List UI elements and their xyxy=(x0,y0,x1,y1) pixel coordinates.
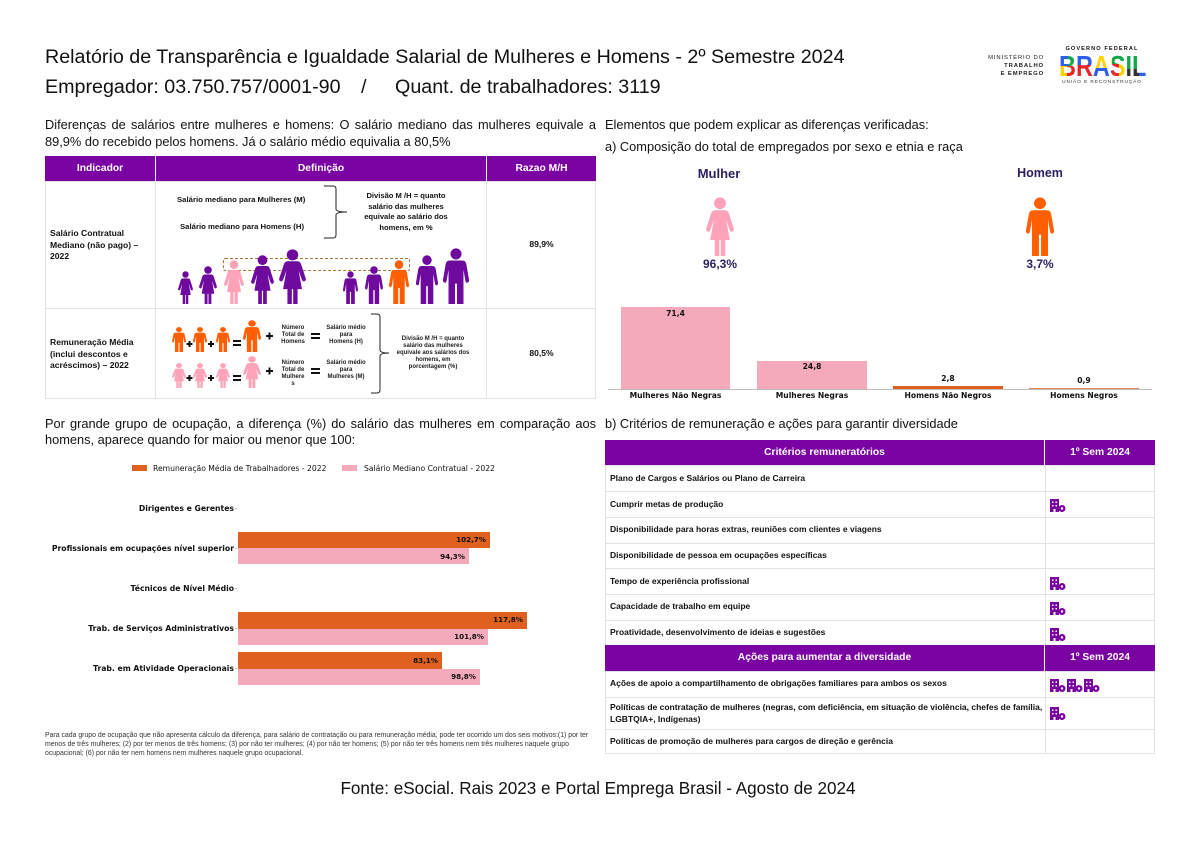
logo: ministério: E EMPREGO xyxy=(1001,71,1044,77)
chart: composition columns: Mulheres Negras xyxy=(776,391,848,400)
panel: criteria table: 1º Sem 2024 xyxy=(1070,447,1130,458)
text block: occupation: homens, aparece quando for maior ou menor que 100: xyxy=(45,432,355,447)
panel: indicator table: Razao M/H xyxy=(515,163,568,174)
text: mean salary women: para xyxy=(340,367,352,373)
definition: division note: equivale ao salário dos xyxy=(364,212,448,221)
employer line: / xyxy=(361,76,366,98)
text: division mean xyxy=(396,336,470,370)
definition: median salary labels xyxy=(177,195,305,231)
panel: criteria table: Plano de Cargos e Salários ou Plano de Carreira xyxy=(610,473,805,483)
brace: median xyxy=(324,186,347,238)
panel: criteria table: Ações para aumentar a diversidade xyxy=(738,652,911,663)
panel: criteria table: 1º Sem 2024 xyxy=(1070,652,1130,663)
sex composition: woman xyxy=(698,166,740,271)
sex composition: woman: 96,3% xyxy=(703,257,737,271)
employer line: Quant. de trabalhadores: 3119 xyxy=(395,76,661,98)
chart: occupation bars: Trab. em Atividade Operacionais xyxy=(93,664,234,673)
panel: indicator table: 89,9% xyxy=(529,239,554,249)
sex composition: woman: Mulher xyxy=(698,166,740,181)
definition: division note: homens, em % xyxy=(379,223,433,232)
panel: criteria table: Capacidade de trabalho em equipe xyxy=(610,601,750,611)
panel: indicator table: Salário Contratual Mediano (não pago) – 2022 xyxy=(50,228,138,261)
text: mean salary men: Salário médio xyxy=(326,325,366,331)
employer line xyxy=(45,76,661,98)
text block: occupation: Por grande grupo de ocupação, a diferença (%) do salário das mulheres em comparação aos xyxy=(45,416,596,431)
sex composition: man: 3,7% xyxy=(1026,257,1054,271)
text: division mean: equivale aos salários dos xyxy=(397,350,469,356)
chart: occupation bars: 101,8% xyxy=(454,632,484,641)
logo: ministério xyxy=(988,54,1044,77)
panel: criteria table: Disponibilidade de pessoa em ocupações específicas xyxy=(610,550,827,560)
heading: elements: Elementos que podem explicar as diferenças verificadas: xyxy=(605,117,929,132)
chart: occupation bars: Técnicos de Nível Médio xyxy=(131,584,234,593)
logo: governo federal: GOVERNO FEDERAL xyxy=(1065,46,1139,52)
text: mean salary women: Salário médio xyxy=(326,360,366,366)
people: women row xyxy=(178,249,306,304)
panel: criteria table: Políticas de promoção de mulheres para cargos de direção e gerência xyxy=(610,736,893,746)
legend: Remuneração Média de Trabalhadores - 2022 xyxy=(153,464,326,473)
text: mean salary women xyxy=(326,360,366,380)
logo: governo federal xyxy=(1060,46,1146,85)
heading: section a: a) Composição do total de empregados por sexo e etnia e raça xyxy=(605,139,963,154)
panel: criteria table: Disponibilidade para horas extras, reuniões com clientes e viagens xyxy=(610,524,882,534)
text: division mean: homens, em xyxy=(415,357,450,363)
chart: occupation bars: Trab. de Serviços Administrativos xyxy=(88,624,234,633)
footnote xyxy=(45,732,588,757)
chart: occupation bars: 98,8% xyxy=(451,672,476,681)
logo: governo federal: UNIÃO E RECONSTRUÇÃO xyxy=(1062,80,1142,85)
panel: criteria table: Políticas de contratação de mulheres (negras, com deficiência, em situação de violência, chefes de família, xyxy=(610,702,1042,712)
text block: occupation xyxy=(45,416,596,447)
text block: salary differences: 89,9% do recebido pelos homens. Já o salário médio equivalia a 80,5% xyxy=(45,134,450,149)
text: total women: s xyxy=(291,381,295,387)
source: Fonte: eSocial. Rais 2023 e Portal Emprega Brasil - Agosto de 2024 xyxy=(340,779,856,798)
chart: composition columns: 0,9 xyxy=(1077,376,1091,385)
definition: median salary labels: Salário mediano para Homens (H) xyxy=(180,222,304,231)
text block: salary differences xyxy=(45,117,596,149)
icons: building markers xyxy=(1050,499,1100,720)
text: division mean: porcentagem (%) xyxy=(409,364,457,370)
definition: division note: salário das mulheres xyxy=(368,202,444,211)
text: mean salary men: Homens (H) xyxy=(329,339,363,345)
chart: occupation bars: 83,1% xyxy=(413,656,438,665)
icons: women sum xyxy=(172,356,261,388)
chart: composition columns: 71,4 xyxy=(666,309,685,318)
text: division mean: Divisão M /H = quanto xyxy=(402,336,464,342)
definition: median salary labels: Salário mediano para Mulheres (M) xyxy=(177,195,305,204)
chart: occupation bars: 102,7% xyxy=(456,535,486,544)
chart: occupation bars: 117,8% xyxy=(493,615,523,624)
footnote: ocupacional; (6) por não ter nem homens nem mulheres naquele grupo ocupacional. xyxy=(45,750,303,757)
chart: occupation bars xyxy=(52,504,527,685)
text: total women: Total de xyxy=(282,367,304,373)
panel: indicator table: Definição xyxy=(298,163,344,174)
panel: criteria table: Critérios remuneratórios xyxy=(764,447,885,458)
panel: criteria table xyxy=(605,440,1155,754)
chart: composition columns: Homens Não Negros xyxy=(905,391,991,400)
definition: division note xyxy=(364,191,448,232)
brace: mean xyxy=(371,314,389,394)
sex composition: man xyxy=(1017,166,1063,271)
panel: criteria table: LGBTQIA+, Indígenas) xyxy=(610,714,700,724)
title: Relatório de Transparência e Igualdade Salarial de Mulheres e Homens - 2º Semestre 2024 xyxy=(45,46,845,68)
panel: criteria table: Proatividade, desenvolvimento de ideias e sugestões xyxy=(610,627,825,637)
text: total women xyxy=(281,360,304,387)
median line dashed box xyxy=(223,258,410,271)
sex composition: man: Homem xyxy=(1017,166,1063,180)
footnote: menos de três mulheres; (2) por ter menos de três homens; (3) por não ter mulheres; (4) por não ter homens; (5) por não ter três homens nem três mulheres naquele grupo xyxy=(45,741,569,748)
legend xyxy=(132,464,495,473)
chart: occupation bars: Profissionais em ocupações nível superior xyxy=(52,544,234,552)
chart: occupation bars: Dirigentes e Gerentes xyxy=(139,504,234,512)
people: men row xyxy=(343,248,469,304)
text: division mean: salário das mulheres xyxy=(403,343,463,349)
heading: section b: b) Critérios de remuneração e ações para garantir diversidade xyxy=(605,416,958,431)
panel: indicator table: 80,5% xyxy=(529,348,554,358)
panel: indicator table: Remuneração Média (inclui descontos e acréscimos) – 2022 xyxy=(50,337,134,370)
panel: indicator table: Indicador xyxy=(77,163,123,174)
panel: criteria table: Ações de apoio a compartilhamento de obrigações familiares para ambos os sexos xyxy=(610,678,947,688)
text block: salary differences: Diferenças de salários entre mulheres e homens: O salário mediano das mulheres equivale a xyxy=(45,117,596,132)
chart: occupation bars: 94,3% xyxy=(440,552,465,561)
text: mean salary men xyxy=(326,324,366,345)
panel: criteria table: Tempo de experiência profissional xyxy=(610,576,749,586)
plus and equals symbols xyxy=(266,332,320,374)
chart: composition columns: 24,8 xyxy=(803,362,821,371)
footnote: Para cada grupo de ocupação que não apresenta cálculo da diferença, para salário de contratação ou para remuneração média, pode ter ocorrido um dos seis motivos:(1) por ter xyxy=(45,732,588,739)
text: total men: Número Total de Homens xyxy=(281,325,305,345)
panel: indicator table xyxy=(45,156,596,399)
employer line: Empregador: 03.750.757/0001-90 xyxy=(45,76,341,98)
panel: criteria table: Cumprir metas de produção xyxy=(610,499,723,509)
chart: composition columns: Homens Negros xyxy=(1050,391,1118,400)
chart: composition columns: Mulheres Não Negras xyxy=(630,391,721,400)
text: total women: Mulhere xyxy=(281,374,304,380)
chart: composition columns: 2,8 xyxy=(941,374,955,383)
text: total women: Número xyxy=(282,360,304,366)
chart: composition columns xyxy=(608,307,1152,400)
icons: men sum xyxy=(172,320,262,352)
text: mean salary men: para xyxy=(340,332,352,338)
text: mean salary women: Mulheres (M) xyxy=(327,374,364,380)
logo: ministério: TRABALHO xyxy=(1004,63,1044,69)
legend: Salário Mediano Contratual - 2022 xyxy=(364,464,495,473)
logo: ministério: MINISTÉRIO DO xyxy=(988,55,1044,61)
definition: division note: Divisão M /H = quanto xyxy=(366,191,446,200)
